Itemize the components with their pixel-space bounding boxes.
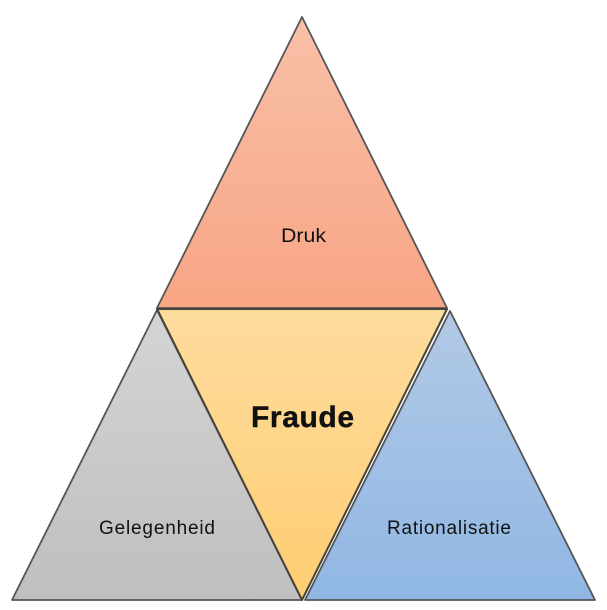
label: Gelegenheid: Gelegenheid	[99, 518, 215, 539]
label: Rationalisatie: Rationalisatie	[387, 518, 511, 539]
panel: Rationalisatie triangle	[305, 311, 595, 600]
panel: Gelegenheid triangle	[12, 310, 302, 600]
panel: Fraude triangle	[157, 309, 447, 600]
panel: Druk triangle	[157, 17, 447, 308]
label: Druk: Druk	[281, 226, 327, 247]
label: Fraude: Fraude	[251, 401, 354, 434]
